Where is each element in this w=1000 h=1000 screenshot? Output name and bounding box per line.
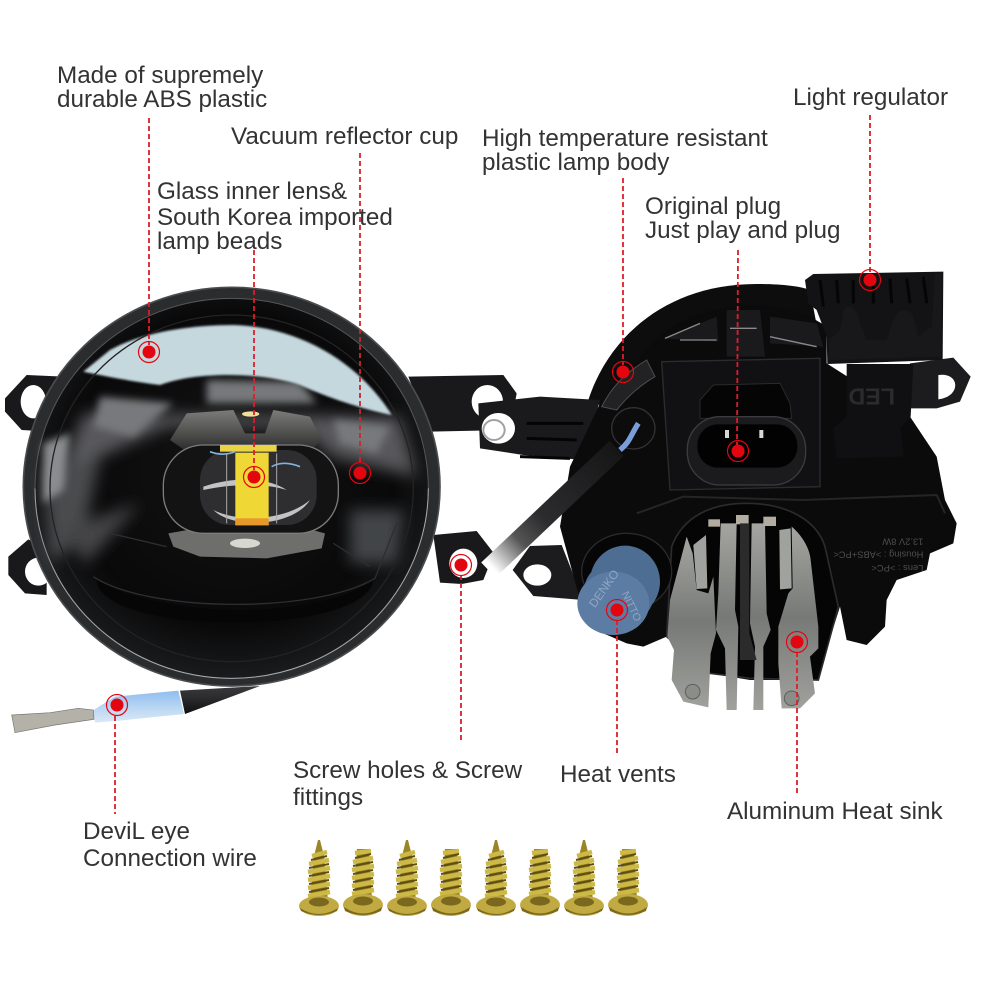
- callout markers: [106, 270, 880, 716]
- yellow LED strip: [235, 453, 269, 525]
- label: original plug: Original plug: [645, 193, 781, 220]
- arm bracket: [478, 397, 600, 460]
- label: glass inner lens: lamp beads: [157, 228, 282, 255]
- LED strip ends: [220, 445, 277, 452]
- plug pins: [725, 430, 763, 438]
- lens housing: [163, 445, 338, 533]
- moulded labels: [833, 536, 923, 573]
- lower lug hole: [523, 564, 551, 586]
- LED moulded text: LED: [848, 383, 895, 409]
- vent cap text 2: NITTO: [619, 590, 643, 623]
- label: lamp body: plastic lamp body: [482, 149, 670, 176]
- dashed callout lines: [115, 115, 870, 814]
- heat sink: right plate: [778, 527, 818, 708]
- heat sink: center fin 2: [750, 523, 771, 710]
- moulded labels: Lens : >PC<: [871, 563, 923, 573]
- label: glass inner lens: South Korea imported: [157, 204, 393, 231]
- right lamp: rear view: [478, 272, 971, 710]
- moulded labels: 13.2V 8W: [882, 536, 923, 546]
- socket interior: [697, 424, 797, 468]
- lower body highlight: [637, 495, 945, 513]
- label: light regulator: Light regulator: [793, 84, 948, 111]
- label: aluminum heat sink: Aluminum Heat sink: [727, 798, 944, 825]
- regulator gear: [805, 272, 943, 364]
- crown shoulders: [828, 273, 942, 360]
- label: screw holes: fittings: [293, 784, 363, 811]
- inner lens: [200, 450, 317, 525]
- rivets: [685, 684, 799, 706]
- outer rim: [23, 287, 440, 686]
- arm ribs: [520, 423, 583, 458]
- connection wire: [12, 686, 260, 733]
- label: heat vents: Heat vents: [560, 761, 676, 788]
- vent cap text: DENKO: [586, 567, 622, 610]
- main body: [560, 305, 957, 680]
- reflector smears: [43, 413, 417, 563]
- heat sink: left prong: [693, 535, 707, 589]
- heat sink: right prong: [779, 528, 792, 589]
- label: connection wire: DeviL eye: [83, 818, 190, 845]
- inner reflector trim: [50, 315, 413, 662]
- lower lug: [513, 545, 583, 600]
- label: durable ABS plastic: Made of supremely: [57, 62, 263, 89]
- top ribs: [663, 310, 823, 357]
- bracket holes: [21, 385, 503, 586]
- terminal: [12, 708, 94, 733]
- mounting brackets: [5, 375, 517, 595]
- label: durable ABS plastic: durable ABS plastic: [57, 86, 267, 113]
- top bead: [242, 411, 259, 417]
- bottom bead: [230, 539, 260, 548]
- heat sink: fin caps: [708, 515, 776, 527]
- plug socket: [687, 417, 806, 485]
- reflector smear streaks: [43, 380, 390, 503]
- rib highlights: [665, 323, 817, 347]
- arm hole detail: [483, 420, 505, 440]
- side lug hole: [938, 375, 955, 399]
- label: connection wire: Connection wire: [83, 845, 257, 872]
- glass: [35, 298, 428, 678]
- blue wires: [620, 423, 638, 450]
- side lug: [910, 358, 971, 408]
- gear teeth: [820, 277, 927, 307]
- lens vertical lines: [227, 453, 277, 523]
- plug panel: [662, 358, 820, 490]
- vent cap socket: [582, 533, 672, 610]
- plug hood: [700, 383, 792, 418]
- rainbow reflections: [210, 452, 300, 467]
- lamp body highlight curve: [602, 360, 655, 410]
- screws: [299, 840, 648, 916]
- glare band: [83, 325, 392, 415]
- vent cap face: [577, 572, 649, 635]
- label: lamp body: High temperature resistant: [482, 125, 768, 152]
- rear dome: [588, 284, 823, 407]
- grommet: [612, 408, 655, 449]
- blue sleeve: [93, 691, 184, 723]
- arm hole: [482, 413, 515, 444]
- moulded labels: Housing : >ABS+PC<: [833, 550, 923, 560]
- regulator stem: [833, 364, 913, 458]
- black wire: [488, 448, 617, 570]
- black sleeve: [180, 686, 260, 714]
- lens top flange: [170, 410, 322, 452]
- dark lower reflector: [97, 580, 373, 622]
- heat sink: left plate: [667, 537, 716, 707]
- label: vacuum reflector cup: Vacuum reflector cup: [231, 123, 458, 150]
- glass edge highlight: [35, 488, 428, 678]
- label: screw holes: Screw holes & Screw: [293, 757, 522, 784]
- label: glass inner lens: Glass inner lens&: [157, 178, 347, 205]
- lens reflections: [203, 480, 310, 523]
- vent cap side: [584, 546, 660, 626]
- heat sink cavity: [667, 503, 838, 680]
- label: original plug: Just play and plug: [645, 217, 840, 244]
- left lamp: front view: [5, 287, 517, 686]
- lens bottom flange: [168, 527, 325, 558]
- heat sink: center fin 1: [716, 523, 738, 710]
- heat sink: center shadow: [740, 523, 757, 660]
